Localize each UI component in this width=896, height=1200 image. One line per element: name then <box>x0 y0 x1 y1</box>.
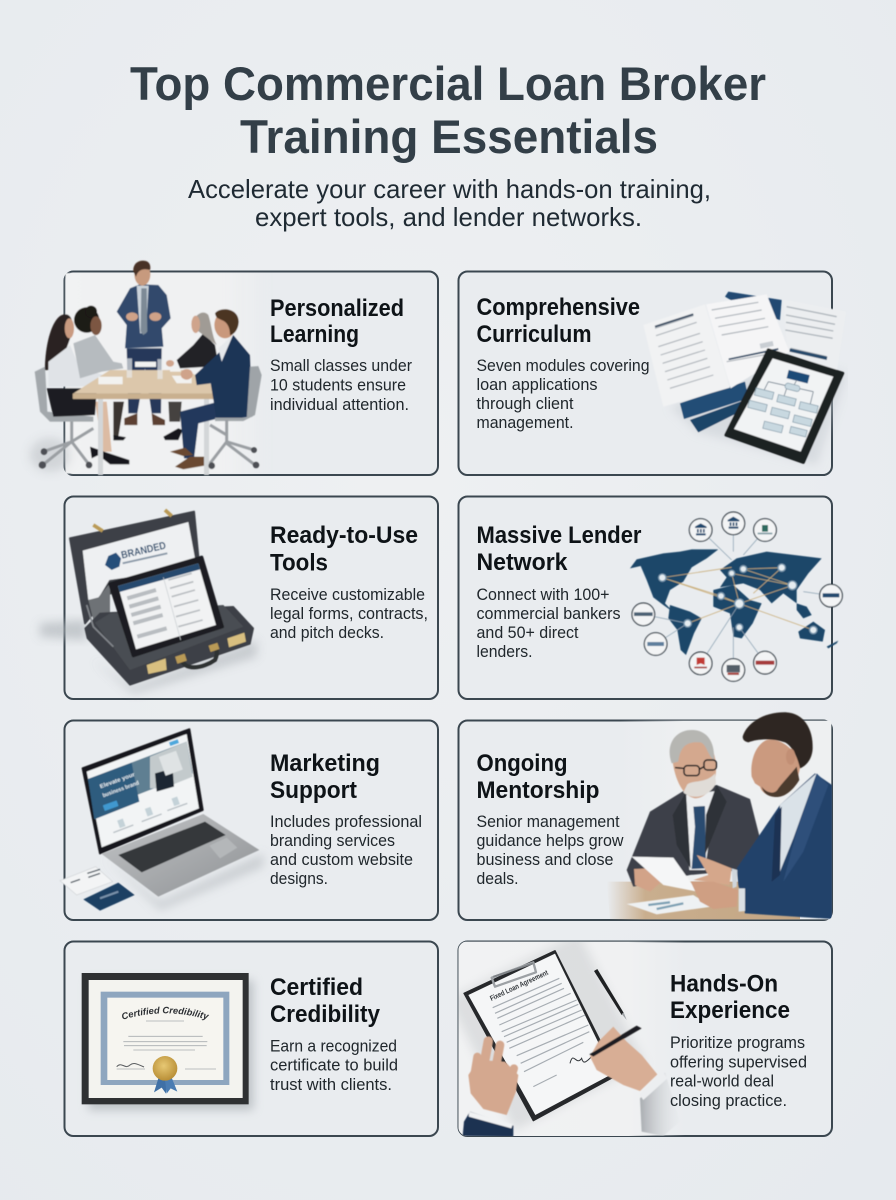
heading: Comprehensive <box>476 294 640 321</box>
panel: Comprehensive Curriculum <box>458 272 847 475</box>
description: Includes professional <box>270 813 422 831</box>
illustration: open books and tablet flowchart <box>643 292 847 465</box>
illustration: framed certificate with seal: Certified Credibility <box>122 1006 210 1020</box>
description: Seven modules covering <box>476 357 650 375</box>
connections <box>662 567 813 630</box>
subtitle: expert tools, and lender networks. <box>255 202 642 232</box>
description: closing practice. <box>670 1092 787 1110</box>
description: 10 students ensure <box>270 376 406 394</box>
heading <box>476 294 640 348</box>
heading <box>670 970 790 1024</box>
older man <box>627 785 760 887</box>
heading: Learning <box>270 321 359 348</box>
heading: Curriculum <box>476 321 592 348</box>
woman right <box>168 402 182 422</box>
hub nodes <box>659 564 817 634</box>
illustration: team meeting around a table <box>30 261 272 475</box>
description: Prioritize programs <box>670 1034 805 1052</box>
description: and pitch decks. <box>270 624 384 642</box>
description: commercial bankers <box>476 605 620 623</box>
table <box>607 882 800 919</box>
panel: Massive Lender Network <box>458 496 842 699</box>
description: Small classes under <box>270 357 412 375</box>
heading: Marketing <box>270 750 380 777</box>
description <box>476 586 620 661</box>
heading <box>270 522 418 576</box>
woman 1 <box>95 402 112 452</box>
heading: Support <box>270 777 357 804</box>
description: management. <box>476 414 574 432</box>
description <box>670 1034 807 1110</box>
description: Receive customizable <box>270 586 425 604</box>
title: Top Commercial Loan Broker <box>130 57 766 110</box>
left hand <box>463 1112 513 1137</box>
title <box>130 57 766 163</box>
illustration: mentor and mentee reviewing documents <box>607 712 832 919</box>
description: Senior management <box>476 813 620 831</box>
heading <box>476 522 642 576</box>
heading: Ready-to-Use <box>270 522 418 549</box>
description: and custom website <box>270 851 413 869</box>
illustration: open briefcase with tablet: BRANDED <box>120 540 168 562</box>
illustration: laptop and business cards: Elevate your <box>99 772 137 790</box>
heading <box>476 750 600 804</box>
continents <box>630 549 838 655</box>
man right <box>180 402 218 458</box>
description: legal forms, contracts, <box>270 605 428 623</box>
description <box>270 586 428 642</box>
panel: Personalized Learning <box>30 261 438 475</box>
description: trust with clients. <box>270 1076 392 1094</box>
panel: Ready-to-Use Tools <box>40 496 438 699</box>
heading: Personalized <box>270 295 404 322</box>
description: Connect with 100+ <box>476 586 610 604</box>
description <box>476 357 650 432</box>
heading: Certified <box>270 974 363 1001</box>
description: deals. <box>476 870 518 888</box>
panel: Hands-On Experience <box>448 933 832 1137</box>
illustration: laptop and business cards: business brand <box>102 780 140 799</box>
right chair <box>215 366 262 421</box>
subtitle <box>188 174 711 232</box>
description <box>270 1038 398 1094</box>
heading: Network <box>476 549 568 576</box>
standing man <box>127 348 162 413</box>
heading: Tools <box>270 550 328 576</box>
description: loan applications <box>476 376 598 394</box>
lender logo circles <box>632 512 842 681</box>
illustration: signing a loan agreement on a clipboard: Fixed Loan Agreement <box>488 968 550 1003</box>
heading: Experience <box>670 997 790 1024</box>
description <box>476 813 624 888</box>
title: Training Essentials <box>240 110 658 163</box>
panel: Marketing Support <box>60 720 438 920</box>
writing hand <box>640 1080 670 1136</box>
description: business and close <box>476 851 614 869</box>
heading: Hands-On <box>670 970 778 998</box>
description: Earn a recognized <box>270 1038 397 1056</box>
table legs and top <box>98 398 103 475</box>
cards <box>60 867 113 895</box>
heading: Massive Lender <box>476 522 642 549</box>
illustration: world map lender network <box>630 512 842 681</box>
heading: Ongoing <box>476 750 568 777</box>
illustration: framed certificate with seal <box>82 973 258 1114</box>
description: individual attention. <box>270 396 409 414</box>
illustration: open briefcase with tablet <box>40 510 257 693</box>
description: branding services <box>270 832 395 850</box>
loose pen <box>594 969 624 1015</box>
description: lenders. <box>476 643 532 661</box>
illustration: signing a loan agreement on a clipboard <box>448 933 685 1137</box>
description: through client <box>476 395 574 413</box>
heading: Credibility <box>270 1001 380 1028</box>
description: guidance helps grow <box>476 832 624 850</box>
description: and 50+ direct <box>476 624 579 642</box>
description: offering supervised <box>670 1054 807 1072</box>
description: real-world deal <box>670 1072 774 1090</box>
woman 2 <box>113 402 124 437</box>
description <box>270 813 422 888</box>
subtitle: Accelerate your career with hands-on training, <box>188 174 711 204</box>
description: designs. <box>270 870 328 888</box>
younger man <box>737 773 832 919</box>
left chair <box>35 367 93 422</box>
panel: Ongoing Mentorship <box>458 712 832 920</box>
heading: Mentorship <box>476 777 600 804</box>
heading <box>270 750 380 804</box>
heading <box>270 974 380 1028</box>
heading <box>270 295 404 348</box>
illustration: laptop and business cards <box>60 729 263 911</box>
description <box>270 357 412 414</box>
panel: Certified Credibility <box>64 940 475 1137</box>
description: certificate to build <box>270 1056 398 1074</box>
